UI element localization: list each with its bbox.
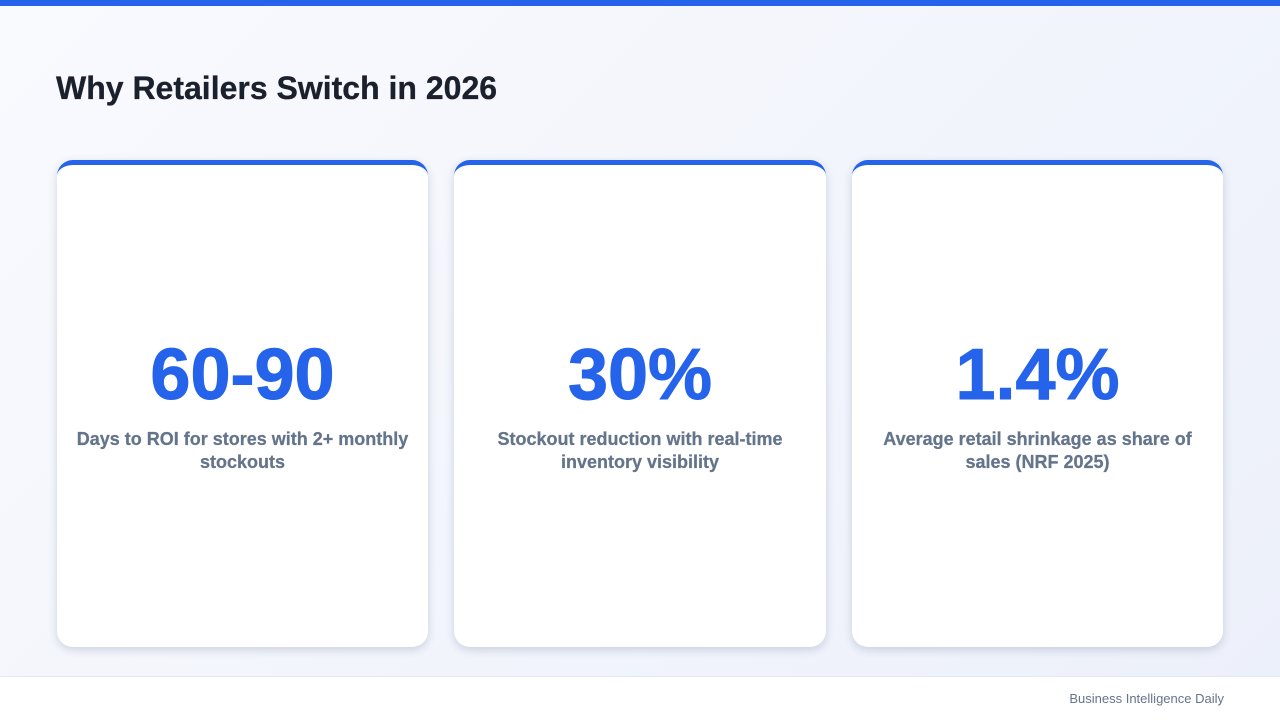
panel: days to ROI [57,160,428,647]
stat: 60-90: 60-90 [150,335,335,415]
description: days to ROI: Days to ROI for stores with 2+ monthly stockouts [77,429,408,472]
panel: retail shrinkage [852,160,1223,647]
description: stockout reduction: Stockout reduction with real-time inventory visibility [497,429,783,472]
title: Why Retailers Switch in 2026 [56,70,497,106]
source credit: Business Intelligence Daily [1069,691,1224,706]
stat: 1.4%: 1.4% [955,335,1120,415]
description: retail shrinkage: Average retail shrinkage as share of sales (NRF 2025) [883,429,1192,472]
panel: stockout reduction [454,160,826,647]
stat: 30%: 30% [568,335,712,415]
footer [0,676,1280,720]
top accent bar [0,0,1280,6]
